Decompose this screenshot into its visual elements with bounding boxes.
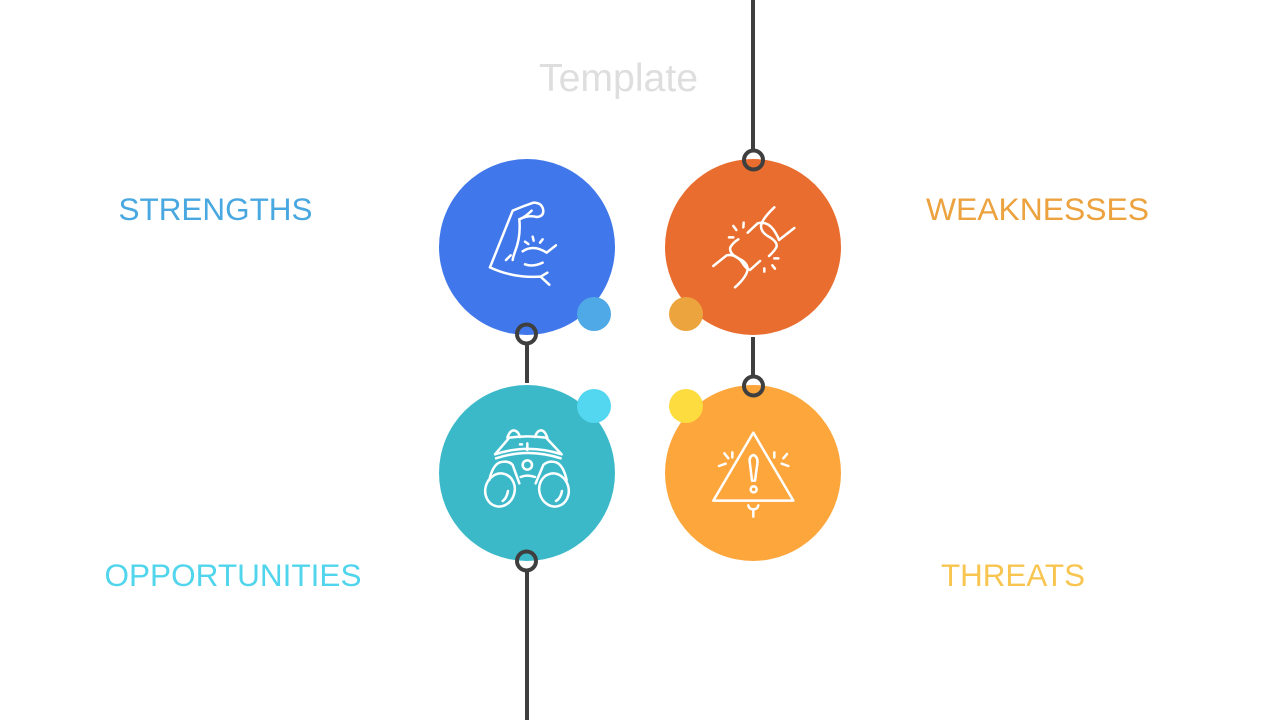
connector: weaknesses to threats: [744, 337, 763, 396]
accent dot: threats: [669, 389, 703, 423]
accent dot: weaknesses: [669, 297, 703, 331]
label: weaknesses: WEAKNESSES: [926, 191, 1149, 227]
connector: weaknesses top: [744, 0, 763, 170]
circle: opportunities: [439, 385, 615, 561]
label: opportunities: OPPORTUNITIES: [104, 557, 362, 593]
accent dot: opportunities: [577, 389, 611, 423]
icon: binoculars: [482, 430, 572, 510]
connector: opportunities bottom: [517, 552, 536, 720]
accent dot: strengths: [577, 297, 611, 331]
icon: warning triangle: [713, 433, 793, 517]
circle: weaknesses: [665, 159, 841, 335]
circle: strengths: [439, 159, 615, 335]
icon: flexed arm: [490, 203, 556, 285]
icon: broken chain: [713, 207, 794, 287]
label: threats: THREATS: [941, 557, 1085, 593]
label: strengths: STRENGTHS: [118, 191, 312, 227]
circle: threats: [665, 385, 841, 561]
connector: strengths to opportunities: [517, 324, 536, 383]
title: Template: [539, 57, 698, 100]
